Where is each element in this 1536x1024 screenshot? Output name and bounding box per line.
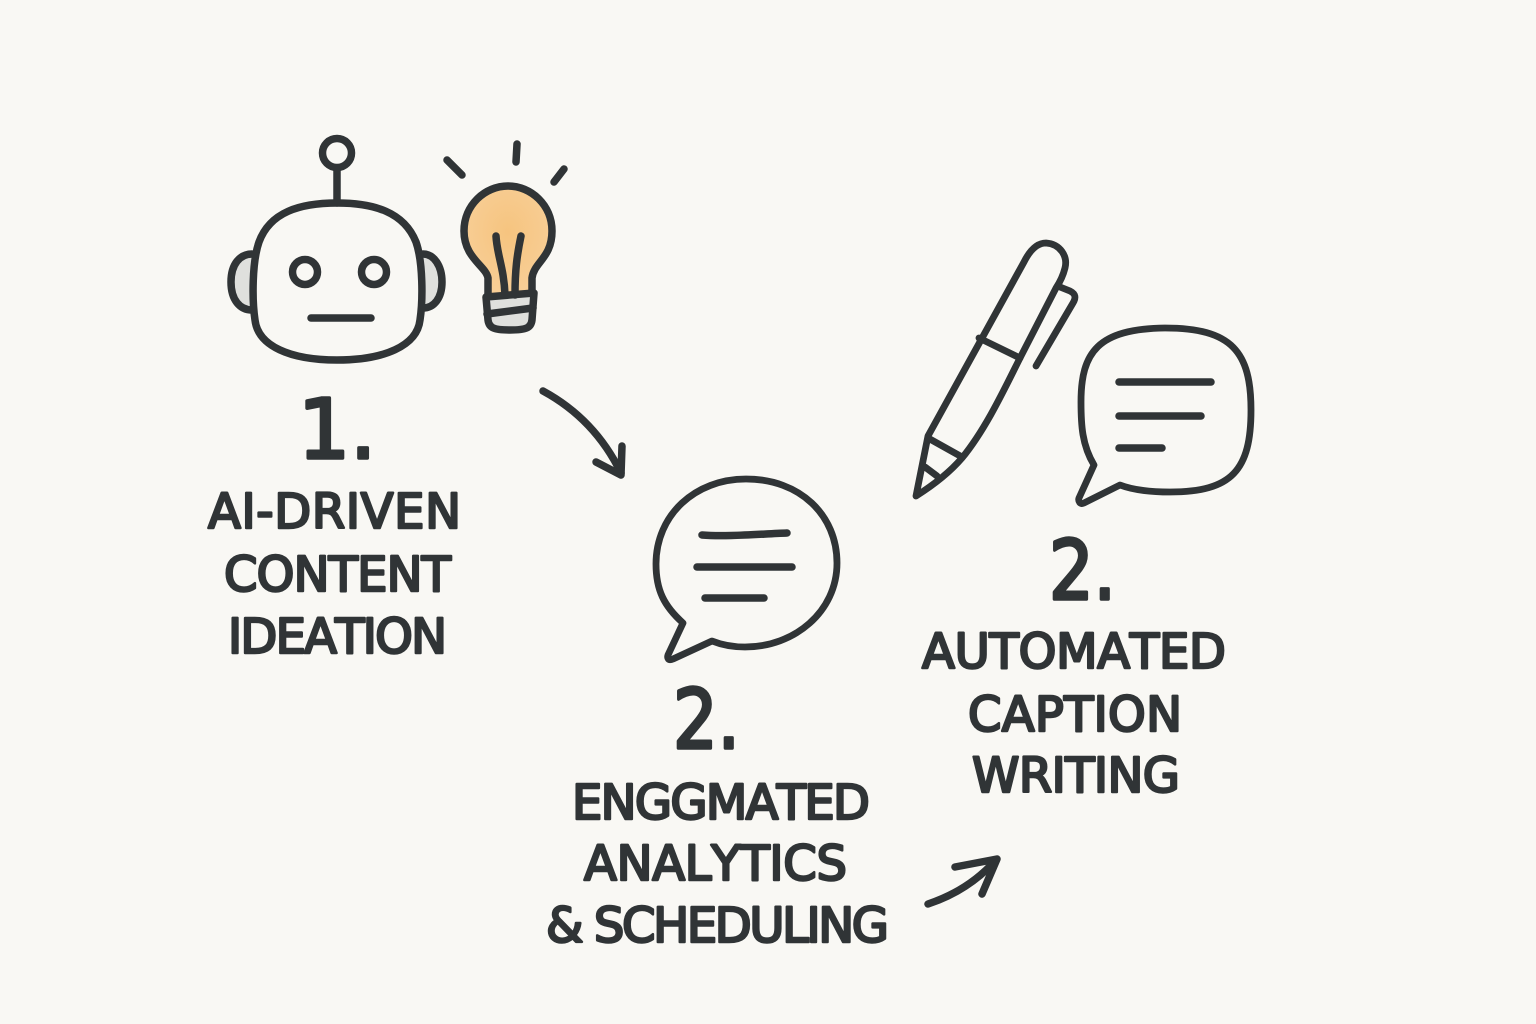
number: 1.: 1.	[298, 383, 376, 478]
text: ENGGMATED ANALYTICS & SCHEDULING	[546, 775, 889, 954]
number: 2.: 2.	[1049, 524, 1116, 619]
text: ENGGMATED ANALYTICS & SCHEDULING: & SCHEDULING	[546, 898, 889, 954]
text: AI-DRIVEN CONTENT IDEATION: IDEATION	[228, 609, 447, 665]
icon: square speech bubble	[1079, 328, 1251, 504]
arrow: step 2 to step 3	[928, 859, 997, 904]
icon: round speech bubble	[656, 479, 837, 660]
text: AI-DRIVEN CONTENT IDEATION	[208, 484, 461, 665]
text: AUTOMATED CAPTION WRITING: CAPTION	[968, 687, 1182, 743]
text: ENGGMATED ANALYTICS & SCHEDULING: ENGGMATED	[572, 775, 870, 831]
arrow: step 1 to step 2	[543, 391, 622, 475]
text: AI-DRIVEN CONTENT IDEATION: CONTENT	[224, 547, 452, 603]
panel: step 3 automated caption writing	[916, 243, 1251, 804]
icon: light bulb	[447, 144, 564, 330]
text: AUTOMATED CAPTION WRITING: WRITING	[972, 748, 1180, 804]
text: AI-DRIVEN CONTENT IDEATION: AI-DRIVEN	[208, 484, 461, 540]
text: AUTOMATED CAPTION WRITING: AUTOMATED	[922, 624, 1226, 680]
icon: robot head	[231, 138, 442, 360]
panel: step 2 engagement analytics and scheduling	[546, 479, 889, 954]
icon: pen	[916, 243, 1075, 496]
text: AUTOMATED CAPTION WRITING	[922, 624, 1226, 804]
panel: step 1 AI-driven content ideation	[208, 138, 564, 665]
text: ENGGMATED ANALYTICS & SCHEDULING: ANALYTICS	[584, 836, 847, 892]
number: 2.: 2.	[673, 673, 740, 768]
